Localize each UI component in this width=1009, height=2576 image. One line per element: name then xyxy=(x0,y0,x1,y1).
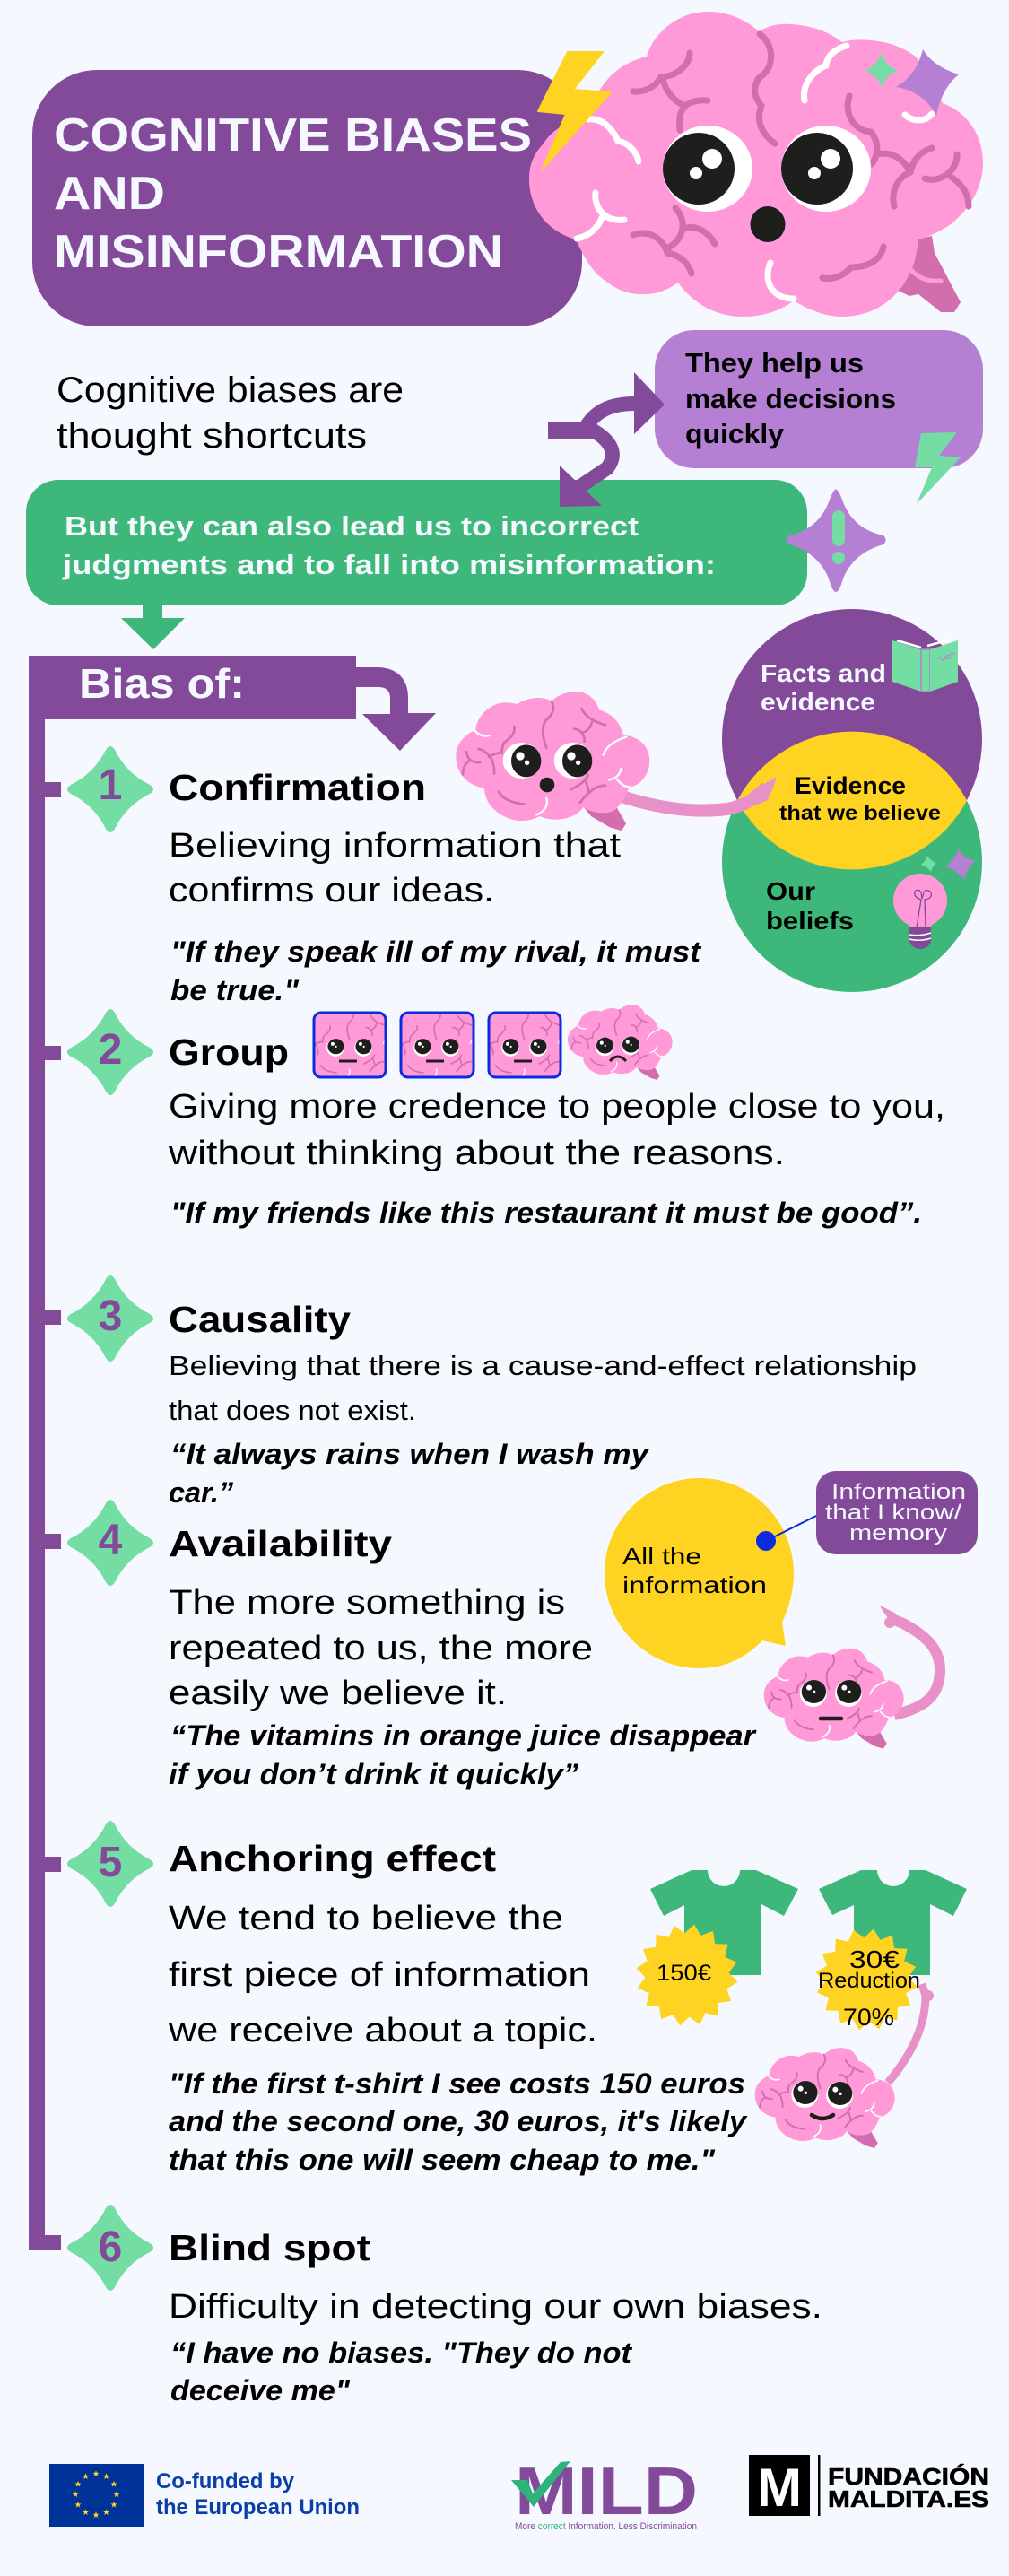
quote xyxy=(170,2337,632,2406)
bias 5: anchoring effect xyxy=(67,1821,748,2176)
title panel xyxy=(32,70,582,326)
icon: t-shirt 30 euros xyxy=(809,1870,967,2037)
venn: facts and evidence: Facts and xyxy=(761,659,886,687)
description: we receive about a topic. xyxy=(168,2012,597,2049)
logo: Fundación Maldita.es: MALDITA.ES xyxy=(828,2487,989,2512)
description: easily we believe it. xyxy=(169,1675,507,1712)
venn: our beliefs: beliefs xyxy=(766,907,854,935)
heading: causality: Causality xyxy=(169,1299,351,1340)
callout: information that I know: memory xyxy=(849,1521,947,1545)
venn: our beliefs: Our xyxy=(766,877,815,905)
callout: information that I know: that I know/ xyxy=(825,1501,961,1525)
heading: bias of: Bias of: xyxy=(79,660,245,707)
icon: anchoring brain pointing up xyxy=(755,1984,934,2147)
icon: big brain mascot xyxy=(529,12,983,317)
quote: “It always rains when I wash my xyxy=(170,1438,650,1470)
speech bubble: all the information xyxy=(605,1478,794,1668)
panel: they help us: They help us xyxy=(685,347,864,379)
description: confirms our ideas. xyxy=(169,872,494,909)
icon: square brain 2 xyxy=(400,1012,475,1078)
intro text xyxy=(57,370,404,456)
icon: t-shirt 30 euros: 70% xyxy=(843,2004,894,2031)
quote xyxy=(170,936,701,1006)
description xyxy=(169,827,622,909)
description xyxy=(169,1584,593,1712)
venn: our beliefs xyxy=(766,877,854,935)
speech bubble: all the information: information xyxy=(622,1571,767,1598)
arrow: split purple arrows xyxy=(548,372,665,507)
logo: MILD: More correct Information. Less Discrimination xyxy=(515,2521,697,2532)
description xyxy=(169,1350,917,1426)
venn: evidence that we believe xyxy=(779,772,941,824)
quote: if you don’t drink it quickly” xyxy=(169,1758,578,1790)
icon: yellow lightning xyxy=(538,52,611,169)
description xyxy=(168,1900,597,2049)
panel: they help us: quickly xyxy=(685,418,785,449)
icon: light bulb xyxy=(893,849,975,949)
heading: anchoring effect: Anchoring effect xyxy=(169,1838,496,1879)
number badge 2: 2 xyxy=(99,1026,122,1074)
description: Believing information that xyxy=(169,827,622,865)
panel: green statement: judgments and to fall into misinformation: xyxy=(62,549,716,580)
logo: EU co-funded: the European Union xyxy=(156,2495,360,2519)
venn diagram xyxy=(722,609,982,992)
number badge 3: 3 xyxy=(99,1292,122,1340)
venn: facts and evidence: evidence xyxy=(761,688,875,716)
number badge 4: 4 xyxy=(99,1517,123,1564)
icon: t-shirt 30 euros: Reduction xyxy=(818,1969,920,1993)
quote: "If my friends like this restaurant it must be good”. xyxy=(170,1197,922,1229)
icon: square brain 1 xyxy=(312,1012,387,1078)
bias 4: availability xyxy=(67,1500,757,1790)
icon: t-shirt 150 euros xyxy=(630,1870,798,2032)
description: Giving more credence to people close to you, xyxy=(169,1088,945,1126)
icon: green lightning xyxy=(915,432,961,504)
number badge 2 xyxy=(67,1009,153,1095)
quote: that this one will seem cheap to me." xyxy=(169,2144,716,2176)
panel: they help us: make decisions xyxy=(685,383,896,414)
icon: availability brain pointing up xyxy=(764,1607,940,1748)
panel: they help us xyxy=(655,330,983,468)
icon: square brain 3 xyxy=(488,1012,561,1078)
quote xyxy=(169,2067,748,2176)
quote: “The vitamins in orange juice disappear xyxy=(170,1719,757,1752)
arrow: bias header down xyxy=(356,667,436,751)
icon: t-shirt 30 euros: 30€ xyxy=(849,1945,900,1973)
venn: evidence that we believe: Evidence xyxy=(795,772,906,799)
heading: blind spot: Blind spot xyxy=(169,2227,370,2268)
title xyxy=(54,109,532,278)
description: without thinking about the reasons. xyxy=(168,1135,785,1172)
bias 2: group xyxy=(67,1009,945,1229)
panel: green statement xyxy=(26,480,807,605)
venn: facts and evidence xyxy=(761,659,886,716)
logo: MILD: MILD xyxy=(515,2453,698,2528)
number badge 3 xyxy=(67,1275,153,1362)
icon: pointing arm to venn xyxy=(619,777,777,811)
number badge 5: 5 xyxy=(99,1839,122,1886)
bias 1: confirmation xyxy=(67,746,701,1006)
number badge 1 xyxy=(67,746,153,832)
description: that does not exist. xyxy=(169,1395,416,1426)
description: repeated to us, the more xyxy=(169,1630,593,1667)
number badge 6: 6 xyxy=(99,2224,122,2271)
number badge 1: 1 xyxy=(99,761,122,809)
intro text: thought shortcuts xyxy=(57,416,367,456)
heading: group: Group xyxy=(169,1031,289,1073)
quote: car.” xyxy=(169,1476,233,1509)
number badge 6 xyxy=(67,2205,153,2291)
panel: green statement: But they can also lead us to incorrect xyxy=(65,510,639,542)
quote: and the second one, 30 euros, it's likely xyxy=(169,2105,748,2137)
bias 6: blind spot xyxy=(67,2205,822,2406)
icon: exclamation diamond xyxy=(787,489,886,592)
bias 3: causality xyxy=(67,1275,917,1509)
title: AND xyxy=(54,168,165,220)
quote: "If they speak ill of my rival, it must xyxy=(170,936,701,968)
icon: confirmation brain xyxy=(456,692,649,830)
description: Believing that there is a cause-and-effect relationship xyxy=(169,1350,917,1381)
description: Difficulty in detecting our own biases. xyxy=(169,2288,822,2326)
quote xyxy=(169,1719,757,1790)
logo: EU co-funded: Co-funded by xyxy=(156,2469,295,2493)
venn: evidence that we believe: that we believe xyxy=(779,801,941,824)
heading: availability: Availability xyxy=(169,1523,392,1564)
arrow: green down xyxy=(121,605,185,649)
number badge 4 xyxy=(67,1500,153,1586)
logo: Fundación Maldita.es: FUNDACIÓN xyxy=(828,2463,989,2490)
quote: “I have no biases. "They do not xyxy=(170,2337,632,2369)
logo: EU co-funded xyxy=(49,2464,360,2527)
heading: confirmation: Confirmation xyxy=(169,767,426,808)
callout: information that I know xyxy=(756,1471,978,1554)
logo: Fundación Maldita.es xyxy=(749,2455,989,2518)
callout: information that I know: Information xyxy=(831,1480,966,1504)
quote: deceive me" xyxy=(170,2374,351,2406)
quote xyxy=(169,1438,650,1509)
icon: sad brain xyxy=(568,1005,673,1079)
intro text: Cognitive biases are xyxy=(57,370,404,410)
quote: be true." xyxy=(170,974,300,1006)
icon: t-shirt 150 euros: 150€ xyxy=(657,1961,711,1986)
description xyxy=(168,1088,945,1172)
description: We tend to believe the xyxy=(169,1900,563,1937)
description: The more something is xyxy=(169,1584,565,1622)
icon: open book xyxy=(892,640,958,692)
timeline bar and bias header xyxy=(29,656,356,2250)
title: MISINFORMATION xyxy=(54,226,503,278)
speech bubble: all the information: All the xyxy=(622,1543,701,1570)
quote: "If the first t-shirt I see costs 150 euros xyxy=(169,2067,745,2100)
description: first piece of information xyxy=(169,1956,590,1994)
number badge 5 xyxy=(67,1821,153,1907)
title: COGNITIVE BIASES xyxy=(54,109,532,161)
logo: Fundación Maldita.es: M xyxy=(757,2458,802,2518)
